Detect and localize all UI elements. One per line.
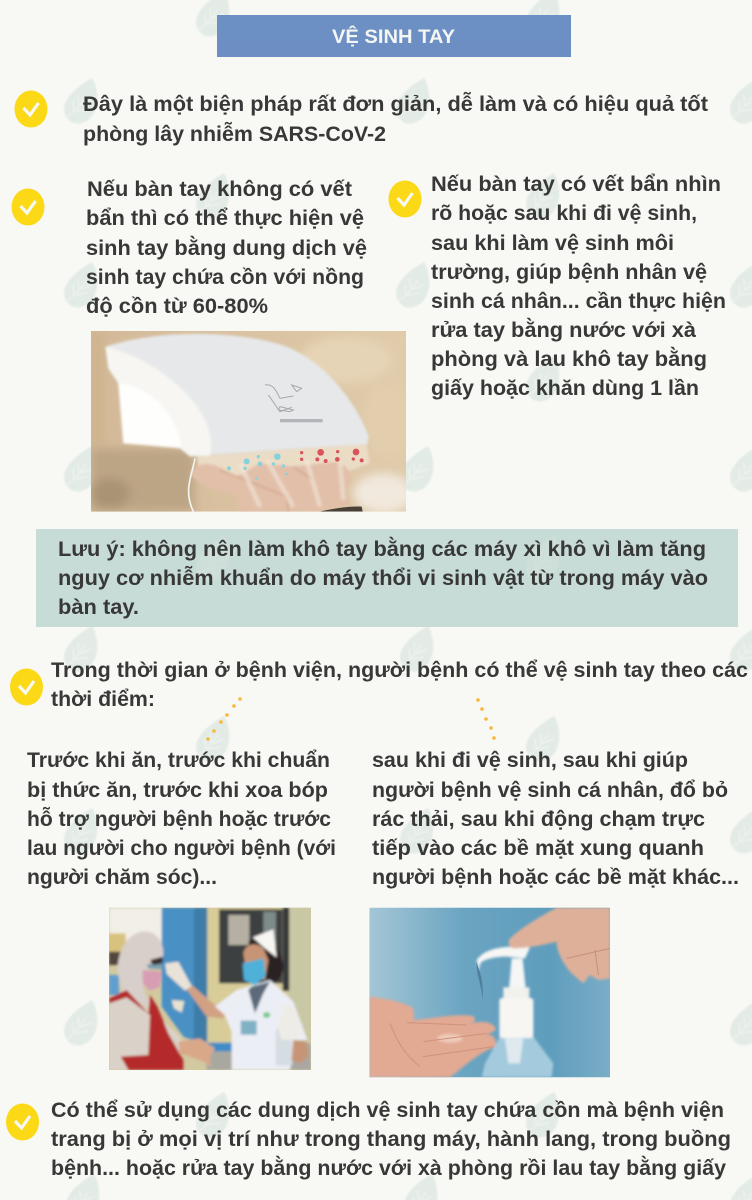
text block: after moments: người bệnh hoặc các bề mặt khác... (372, 866, 739, 889)
icon: check 2 (12, 188, 44, 226)
text block: sanitizer advice: bệnh... hoặc rửa tay bằng nước với xà phòng rồi lau tay bằng giấy (51, 1156, 726, 1180)
icon: check 5 (6, 1104, 39, 1140)
callout: note: bàn tay. (58, 596, 139, 619)
text block: no visible dirt: sinh tay bằng dung dịch vệ (86, 236, 367, 260)
text block: after moments: người bệnh vệ sinh cá nhân, đổ bỏ (372, 779, 728, 802)
callout: note (36, 529, 738, 627)
text block: before moments: hỗ trợ người bệnh hoặc trước (27, 807, 331, 831)
text block: no visible dirt: Nếu bàn tay không có vết (87, 178, 352, 201)
text block: before moments: Trước khi ăn, trước khi chuẩn (27, 749, 330, 772)
text block: no visible dirt: bẩn thì có thể thực hiện vệ (86, 207, 364, 230)
dotted connector right (476, 698, 496, 740)
text block: before moments: lau người cho người bệnh (với (27, 837, 336, 860)
callout: note: Lưu ý: không nên làm khô tay bằng các máy xì khô vì làm tăng (58, 537, 706, 561)
text block: visible dirt: giấy hoặc khăn dùng 1 lần (431, 377, 699, 400)
text block: sanitizer advice: Có thể sử dụng các dung dịch vệ sinh tay chứa cồn mà bệnh viện (51, 1099, 724, 1122)
text block: visible dirt: trường, giúp bệnh nhân vệ (431, 261, 707, 284)
title (217, 15, 571, 57)
text block: intro: phòng lây nhiễm SARS-CoV-2 (83, 122, 386, 146)
text block: hospital moments (51, 659, 748, 711)
text block: visible dirt: phòng và lau khô tay bằng (431, 347, 707, 371)
text block: no visible dirt: sinh tay chứa cồn với nồng (86, 266, 364, 289)
icon: check 4 (10, 668, 43, 706)
icon: check 3 (388, 180, 422, 218)
text block: intro (83, 92, 708, 146)
photo: nurse checking temperature (109, 908, 311, 1070)
text block: no visible dirt (86, 178, 367, 318)
text block: after moments: sau khi đi vệ sinh, sau khi giúp (372, 749, 688, 772)
text block: sanitizer advice (51, 1099, 731, 1180)
text block: hospital moments: Trong thời gian ở bệnh viện, người bệnh có thể vệ sinh tay theo các (51, 659, 748, 682)
text block: before moments: người chăm sóc)... (27, 866, 217, 889)
callout: note: nguy cơ nhiễm khuẩn do máy thổi vi sinh vật từ trong máy vào (58, 566, 708, 590)
text block: after moments: rác thải, sau khi động chạm trực (372, 808, 705, 831)
title: VỆ SINH TAY (332, 26, 455, 48)
text block: visible dirt (431, 173, 726, 400)
text block: no visible dirt: độ cồn từ 60-80% (86, 295, 268, 318)
dotted connector left (206, 697, 242, 741)
photo: sanitizer pump (369, 908, 610, 1077)
text block: sanitizer advice: trang bị ở mọi vị trí như trong thang máy, hành lang, trong buồng (51, 1128, 731, 1151)
text block: visible dirt: rõ hoặc sau khi đi vệ sinh, (431, 202, 697, 225)
text block: hospital moments: thời điểm: (51, 688, 155, 711)
text block: visible dirt: rửa tay bằng nước với xà (431, 318, 696, 342)
text block: before moments: bị thức ăn, trước khi xoa bóp (27, 779, 328, 802)
text block: intro: Đây là một biện pháp rất đơn giản, dễ làm và có hiệu quả tốt (83, 92, 708, 116)
text block: visible dirt: sinh cá nhân... cần thực hiện (431, 290, 726, 313)
text block: after moments: tiếp vào các bề mặt xung quanh (372, 837, 704, 860)
text block: before moments (27, 749, 336, 889)
text block: after moments (372, 749, 739, 889)
photo: hand dryer (90, 331, 413, 513)
icon: check 1 (14, 90, 48, 128)
text block: visible dirt: sau khi làm vệ sinh môi (431, 232, 674, 255)
text block: visible dirt: Nếu bàn tay có vết bẩn nhìn (431, 173, 721, 196)
